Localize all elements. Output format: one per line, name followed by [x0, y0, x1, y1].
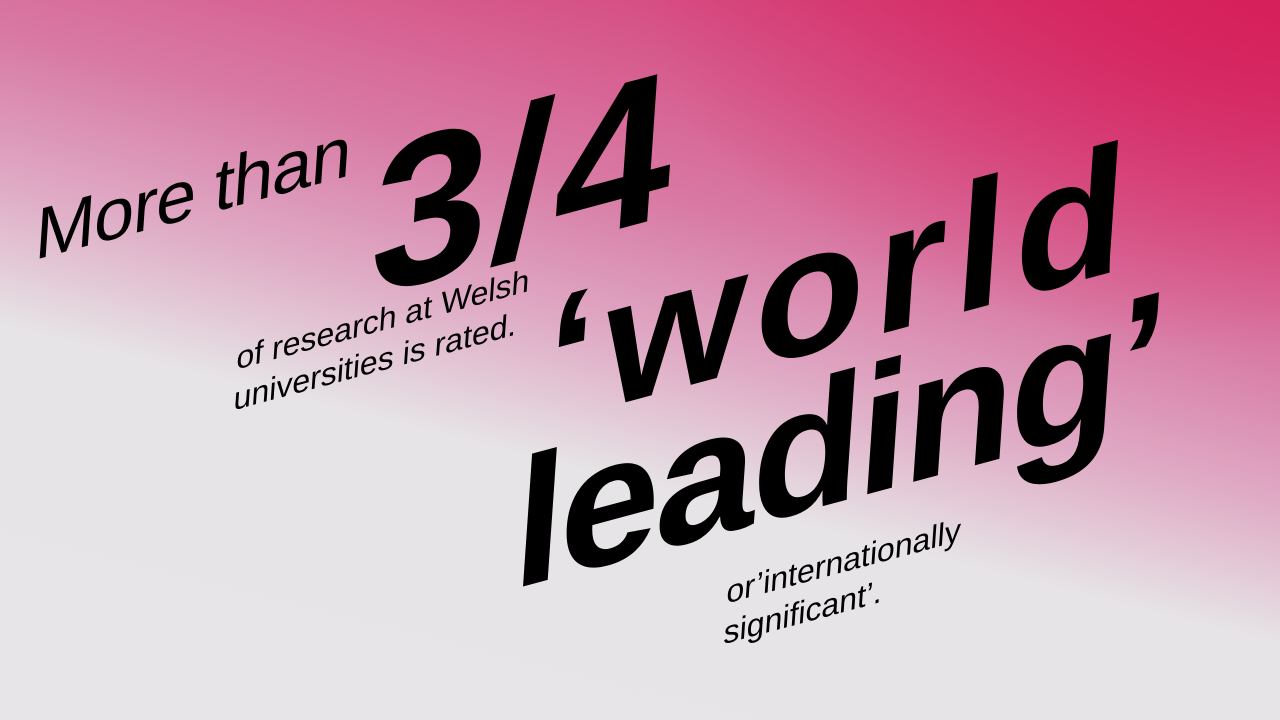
headline: leading': leading’	[508, 251, 1170, 630]
subtext: of research at Welsh universities is rated: universities is rated.	[233, 305, 518, 417]
subtext: or internationally significant: significant’.	[723, 572, 883, 651]
subtext: or internationally significant: or’internationally	[725, 511, 962, 611]
headline number: 3/4: 3/4	[364, 21, 685, 342]
text: More than: More than	[33, 110, 353, 276]
headline: 'world: ‘world	[539, 102, 1143, 465]
subtext: of research at Welsh universities is rated: of research at Welsh	[235, 262, 531, 377]
